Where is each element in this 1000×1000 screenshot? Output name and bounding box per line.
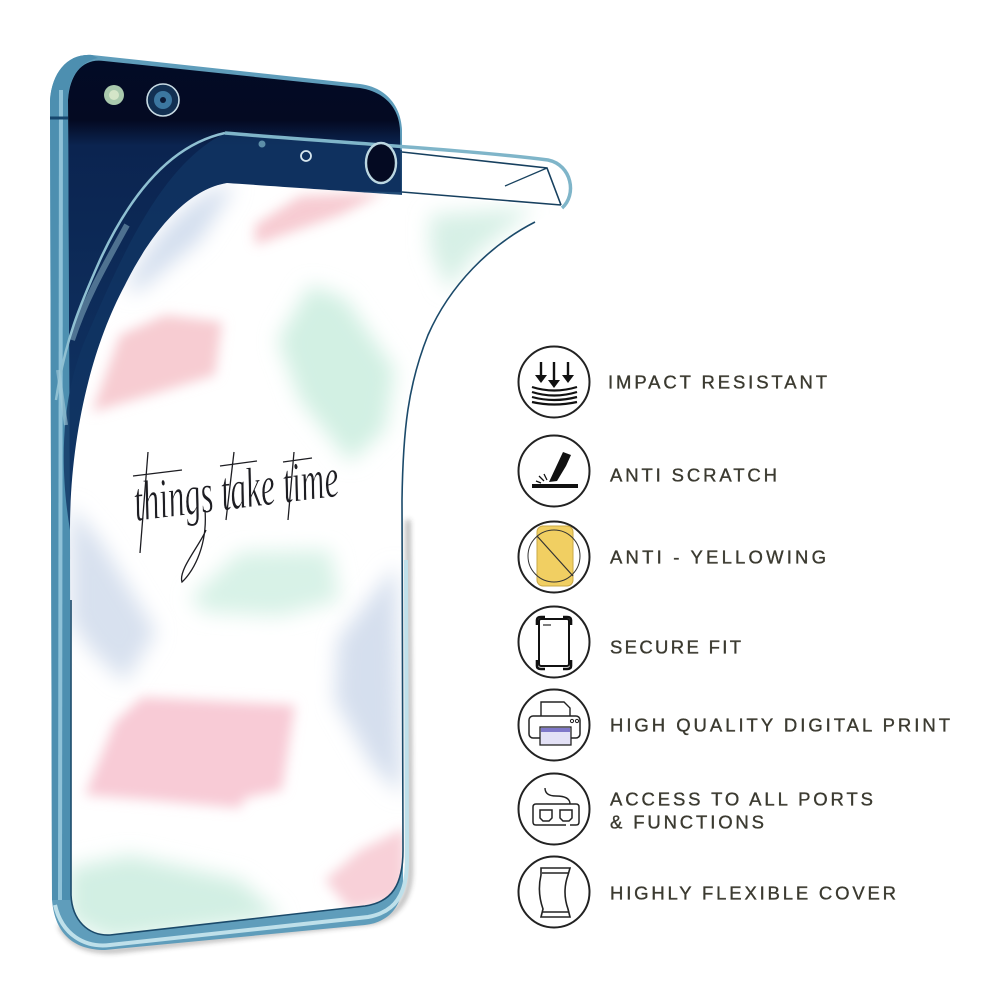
feature: flexible cover: [518, 856, 896, 928]
icon: scratch blade: [518, 436, 590, 506]
screen edge line: [71, 222, 535, 935]
blue side bezel: [50, 55, 98, 900]
icon: flexible cover: [518, 856, 590, 928]
script flourishes: [133, 452, 312, 582]
dark glass: [68, 61, 401, 560]
side button: [72, 225, 127, 340]
label: & FUNCTIONS: [610, 812, 764, 832]
icon: impact arrows: [518, 346, 590, 418]
feature: ports: [518, 774, 873, 844]
label: IMPACT RESISTANT: [608, 372, 827, 392]
printed case screen: [70, 183, 553, 935]
feature: anti scratch: [518, 436, 777, 506]
case speck hole: [301, 151, 311, 161]
bottom case rim: [55, 560, 407, 945]
label: ACCESS TO ALL PORTS: [610, 788, 873, 810]
slogan: things take time: things take time: [130, 446, 342, 533]
case top rim: [64, 133, 402, 530]
label: [610, 788, 873, 832]
flash: [104, 85, 124, 105]
slogan: things take time: [130, 446, 342, 582]
feature: secure fit: [518, 606, 741, 678]
feature: anti yellowing: [518, 522, 826, 592]
case drop shadow: [60, 520, 410, 951]
camera lens: [147, 84, 179, 116]
phone and clear case: [50, 55, 570, 951]
case camera hole: [366, 143, 396, 183]
label: SECURE FIT: [610, 636, 741, 658]
icon: phone case: [518, 606, 590, 678]
phone back: [50, 55, 403, 950]
feature: impact resistant: [518, 346, 827, 418]
label: HIGH QUALITY DIGITAL PRINT: [610, 714, 950, 736]
icon: printer: [518, 690, 590, 760]
paint swatches: [68, 185, 535, 940]
label: ANTI SCRATCH: [610, 464, 777, 486]
icon: yellow phone: [518, 522, 590, 592]
icon: ports: [518, 774, 590, 844]
feature: digital print: [518, 690, 950, 760]
label: ANTI - YELLOWING: [610, 546, 826, 568]
label: HIGHLY FLEXIBLE COVER: [610, 882, 896, 904]
